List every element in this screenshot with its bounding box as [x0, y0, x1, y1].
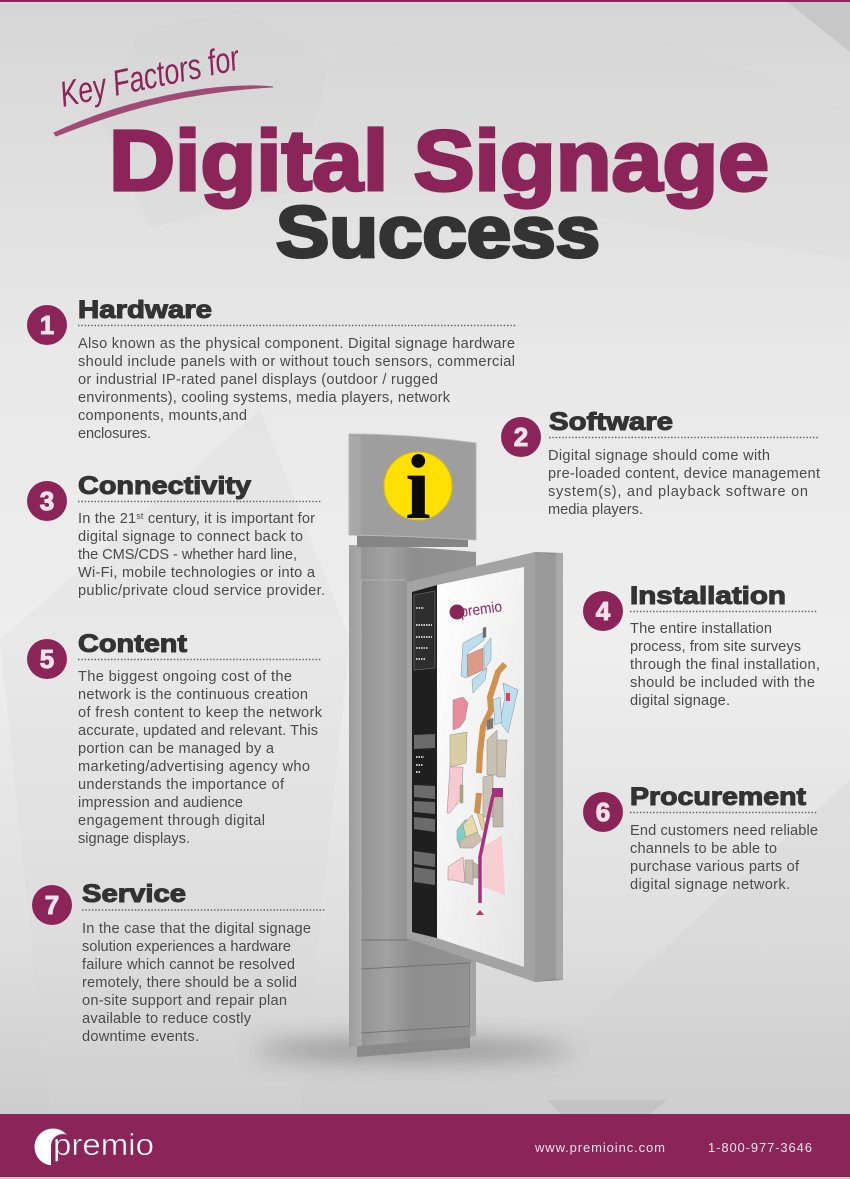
body: Service: remotely, there should be a solid — [82, 975, 297, 991]
body: Content: of fresh content to keep the network — [78, 705, 323, 721]
footer band — [0, 1114, 850, 1179]
body: Connectivity: In the 21 — [78, 511, 136, 527]
body: Procurement: purchase various parts of — [630, 859, 800, 875]
body: Connectivity: digital signage to connect back to — [78, 529, 303, 545]
section 6: Procurement — [583, 783, 818, 893]
body: Installation: through the final installation, — [630, 657, 820, 673]
body: Hardware: should include panels with or without touch sensors, commercial — [78, 354, 515, 370]
section 5: Content — [27, 630, 323, 847]
phone number: 1-800-977-3646 — [708, 1140, 812, 1155]
badge 3 — [27, 481, 67, 521]
body: Installation — [630, 621, 820, 709]
kiosk illustration — [252, 434, 572, 1060]
body: Content: understands the importance of — [78, 777, 285, 793]
section 1: Hardware — [27, 296, 517, 442]
body: Installation: process, from site surveys — [630, 639, 801, 655]
body: Service — [82, 921, 311, 1045]
badge 3: 3 — [40, 486, 54, 516]
badge 1: 1 — [40, 310, 54, 340]
screen logo: premio — [459, 598, 503, 621]
heading: Software: Software — [549, 408, 673, 436]
body: Software: system(s), and playback software on — [548, 484, 808, 500]
subtitle: Key Factors for: Key Factors for — [56, 37, 244, 115]
badge 2 — [501, 417, 541, 457]
body: Connectivity: century, it is important for — [144, 511, 315, 527]
title: Digital Signage Success: Success — [276, 193, 600, 273]
kiosk foot — [357, 1034, 470, 1057]
body: Service: solution experiences a hardware — [82, 939, 291, 955]
icon: information sign: i — [405, 436, 431, 538]
body: Procurement — [630, 823, 818, 893]
body: Service: available to reduce costly — [82, 1011, 252, 1027]
wayfinding map — [447, 627, 518, 915]
body: Hardware: or industrial IP-rated panel displays (outdoor / rugged — [78, 372, 438, 388]
website: www.premioinc.com — [534, 1140, 665, 1155]
kiosk column — [349, 545, 476, 1047]
heading: Connectivity: Connectivity — [78, 472, 251, 500]
body: Content — [78, 669, 323, 847]
body: Installation: digital signage. — [630, 693, 730, 709]
body: Content: accurate, updated and relevant. This — [78, 723, 318, 739]
section 2: Software — [501, 408, 820, 518]
title: Digital Signage Success: Digital Signage — [109, 114, 769, 209]
body: Hardware: components, mounts,and — [78, 408, 247, 424]
heading: Service: Service — [82, 880, 186, 908]
section 7: Service — [32, 880, 325, 1045]
body: Installation: should be included with the — [630, 675, 815, 691]
badge 2: 2 — [514, 422, 528, 452]
body: Procurement: End customers need reliable — [630, 823, 818, 839]
subtitle: Key Factors for — [54, 37, 273, 136]
top accent bar — [0, 0, 850, 2]
body: Service: on-site support and repair plan — [82, 993, 287, 1009]
badge 5: 5 — [40, 644, 54, 674]
body: Hardware — [78, 336, 515, 442]
badge 1 — [27, 305, 67, 345]
section 3: Connectivity — [27, 472, 325, 599]
heading: Procurement: Procurement — [630, 783, 807, 811]
body: Software: Digital signage should come with — [548, 448, 770, 464]
screen sidebar — [414, 591, 435, 885]
body: Software: media players. — [548, 502, 643, 518]
section 4: Installation — [583, 582, 820, 709]
body: Content: impression and audience — [78, 795, 243, 811]
body: Content: The biggest ongoing cost of the — [78, 669, 292, 685]
badge 5 — [27, 639, 67, 679]
body: Procurement: digital signage network. — [630, 877, 790, 893]
body: Software — [548, 448, 820, 518]
body: Hardware: Also known as the physical component. Digital signage hardware — [78, 336, 515, 352]
body: Content: portion can be managed by a — [78, 741, 275, 757]
body: Content: engagement through digital — [78, 813, 265, 829]
body: Service: In the case that the digital signage — [82, 921, 311, 937]
floor shadow — [252, 1040, 572, 1060]
kiosk neck — [357, 534, 468, 547]
body: Service: downtime events. — [82, 1029, 199, 1045]
title: Digital Signage Success — [109, 114, 769, 273]
body: Content: network is the continuous creation — [78, 687, 308, 703]
display screen — [437, 567, 524, 967]
footer logo: premio — [53, 1127, 154, 1162]
heading: Installation: Installation — [630, 582, 786, 610]
body: Connectivity — [78, 511, 325, 599]
badge 6 — [583, 792, 623, 832]
body: Installation: The entire installation — [630, 621, 772, 637]
footer logo — [34, 1127, 154, 1168]
heading: Hardware: Hardware — [78, 296, 212, 324]
badge 7: 7 — [45, 890, 59, 920]
body: Content: marketing/advertising agency who — [78, 759, 310, 775]
badge 4 — [583, 591, 623, 631]
badge 6: 6 — [596, 797, 610, 827]
body: Procurement: channels to be able to — [630, 841, 777, 857]
kiosk head — [349, 434, 476, 540]
body: Hardware: environments), cooling systems, media players, network — [78, 390, 451, 406]
body: Software: pre-loaded content, device management — [548, 466, 820, 482]
icon: information sign — [384, 436, 452, 538]
badge 4: 4 — [596, 596, 611, 626]
body: Connectivity: Wi-Fi, mobile technologies or into a — [78, 565, 316, 581]
body: Hardware: enclosures. — [78, 426, 151, 442]
body: Connectivity: public/private cloud service provider. — [78, 583, 325, 599]
badge 7 — [32, 885, 72, 925]
body: Content: signage displays. — [78, 831, 190, 847]
body: Connectivity: the CMS/CDS - whether hard line, — [78, 547, 297, 563]
body: Connectivity: st — [136, 511, 144, 521]
open display door — [407, 552, 563, 982]
heading: Content: Content — [78, 630, 188, 658]
body: Service: failure which cannot be resolved — [82, 957, 295, 973]
